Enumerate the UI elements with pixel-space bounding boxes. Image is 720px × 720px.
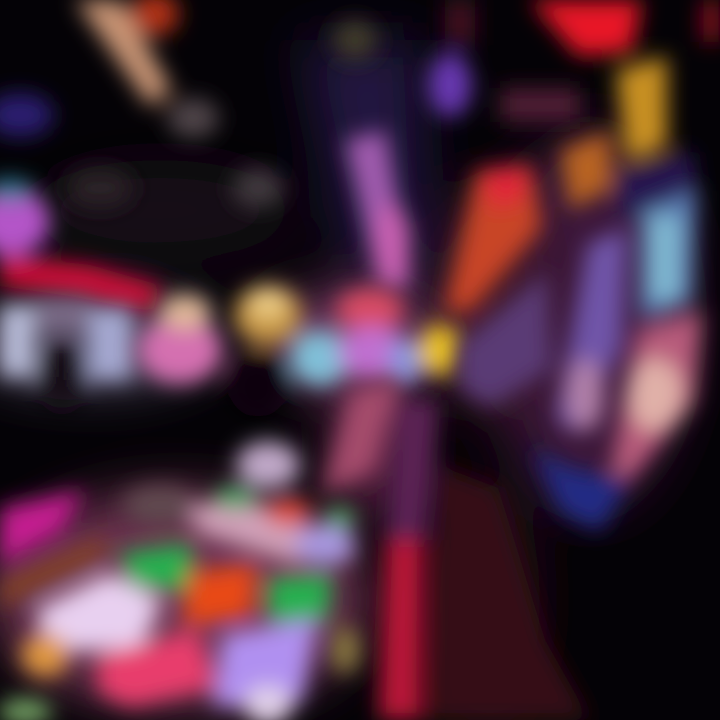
corridor purple light: [345, 130, 412, 290]
central glowing lights: [138, 285, 462, 417]
left windows row: [0, 298, 132, 409]
right slot machines: [444, 0, 720, 532]
floor walkway strips: [322, 378, 590, 720]
ceiling lights and top-left sign: [0, 0, 580, 208]
colorful patterned carpet: [0, 441, 360, 720]
left purple light and red awning: [0, 179, 162, 312]
